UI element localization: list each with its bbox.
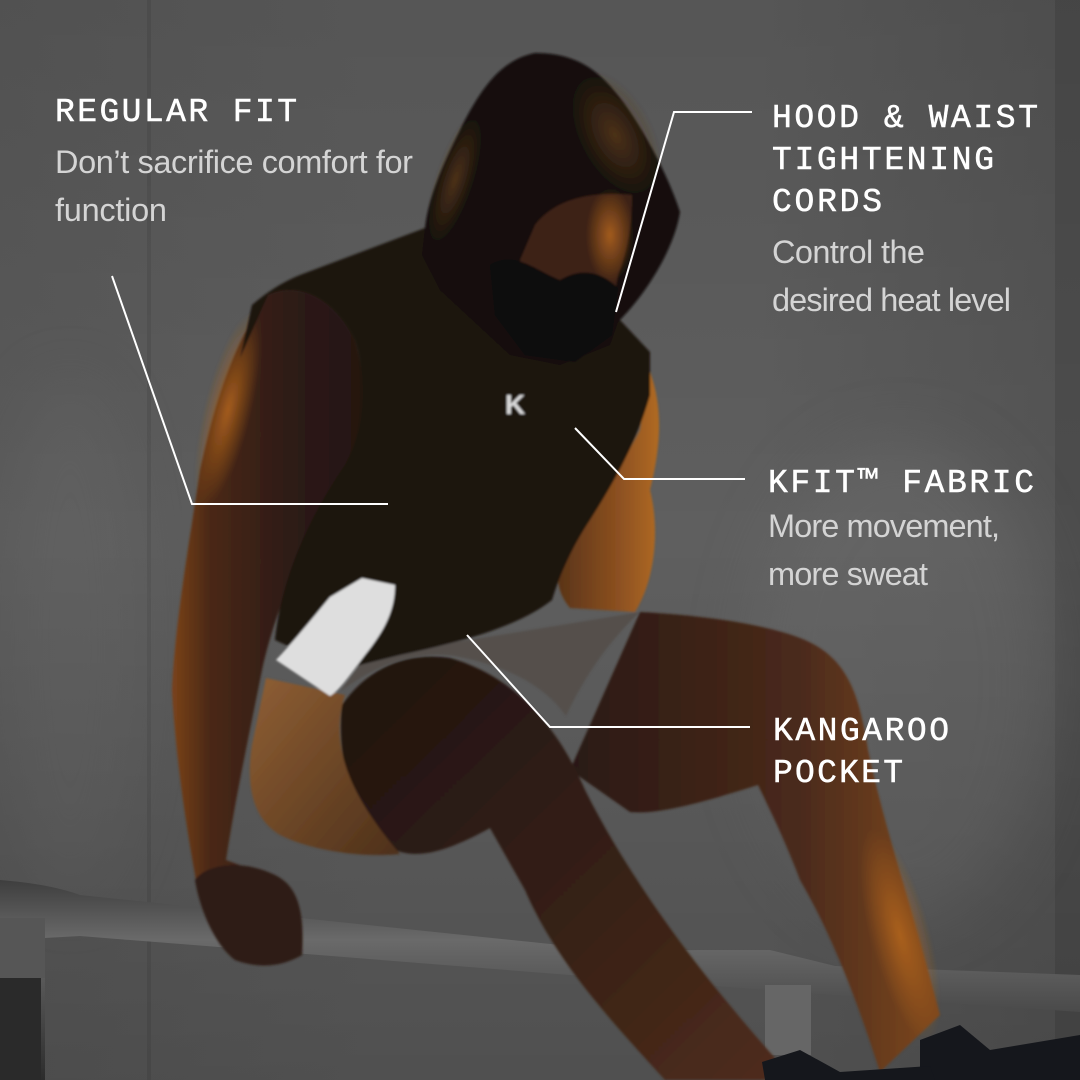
callout: regular fit: Don’t sacrifice comfort for	[55, 144, 413, 180]
callout: regular fit: function	[55, 192, 167, 228]
callout: hood and waist cords: TIGHTENING	[772, 142, 994, 179]
logo on chest: K	[505, 389, 525, 420]
leg highlight	[843, 821, 957, 1049]
back leg and calf	[570, 612, 940, 1072]
callout: kfit fabric: more sweat	[768, 556, 928, 592]
callout: kangaroo pocket: POCKET	[773, 755, 903, 792]
towel	[276, 578, 395, 696]
face highlight	[586, 187, 634, 283]
callout: hood and waist cords: HOOD & WAIST	[772, 100, 1038, 137]
beard	[490, 260, 618, 362]
callout: hood and waist cords: CORDS	[772, 184, 882, 221]
sleeveless top	[240, 228, 650, 670]
callout: kfit fabric: More movement,	[768, 508, 1000, 544]
shoulder highlight	[181, 307, 275, 513]
shoes	[762, 1025, 1080, 1080]
athlete figure	[172, 53, 957, 1080]
callout: hood and waist cords: desired heat level	[772, 282, 1011, 318]
left arm	[172, 290, 364, 880]
tan shorts	[250, 678, 400, 855]
hood	[422, 53, 680, 365]
grey inner shorts	[340, 612, 640, 716]
callout: kfit fabric	[575, 428, 1034, 592]
callout: hood and waist cords	[616, 100, 1038, 318]
face	[520, 194, 632, 330]
metal railing	[0, 880, 1080, 1080]
hood highlight	[414, 107, 496, 253]
rear forearm	[558, 372, 659, 612]
callout: kfit fabric: KFIT™ FABRIC	[768, 465, 1034, 502]
callout: hood and waist cords: Control the	[772, 234, 925, 270]
callout: kangaroo pocket	[467, 635, 949, 792]
callout: kangaroo pocket: KANGAROO	[773, 713, 949, 750]
hood folds	[549, 55, 681, 215]
callout: regular fit	[55, 94, 413, 504]
callout: regular fit: REGULAR FIT	[55, 94, 297, 131]
front thigh and shin	[341, 657, 775, 1080]
left hand	[195, 865, 303, 965]
